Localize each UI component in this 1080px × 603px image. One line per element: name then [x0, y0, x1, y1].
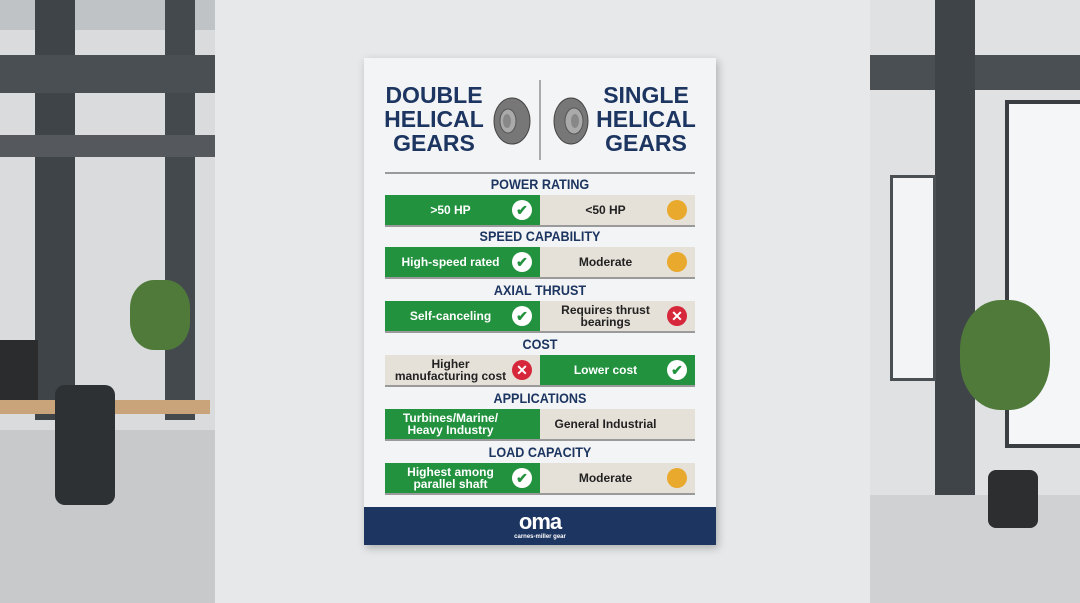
section: applications: APPLICATIONS: [494, 390, 586, 406]
text: ✔: [671, 362, 683, 378]
background: left office: [0, 0, 215, 603]
text: General Industrial: [554, 417, 657, 431]
text: Lower cost: [574, 363, 637, 377]
text: bearings: [580, 315, 630, 329]
text: parallel shaft: [413, 477, 488, 491]
text: >50 HP: [430, 203, 471, 217]
text: ✔: [516, 308, 528, 324]
text: Moderate: [579, 471, 632, 485]
text: Higher: [431, 357, 470, 371]
text: ✕: [516, 362, 528, 378]
text: Self-canceling: [410, 309, 491, 323]
heading: single helical: HELICAL: [596, 106, 696, 132]
heading: double helical: HELICAL: [384, 106, 484, 132]
text: Moderate: [579, 255, 632, 269]
text: ✔: [516, 254, 528, 270]
text: manufacturing cost: [395, 369, 506, 383]
text: ✔: [516, 202, 528, 218]
poster: [364, 58, 716, 545]
footer: logo: carnes-miller gear: [514, 534, 566, 540]
text: Heavy Industry: [407, 423, 494, 437]
text: Turbines/Marine/: [403, 411, 498, 425]
section: load capacity: LOAD CAPACITY: [489, 444, 591, 460]
heading: single helical: SINGLE: [603, 82, 689, 108]
heading: double helical: [384, 82, 484, 156]
section: cost: COST: [522, 336, 557, 352]
heading: single helical: [596, 82, 696, 156]
text: ✔: [516, 470, 528, 486]
footer: logo: oma: [519, 509, 561, 534]
divider: [539, 80, 541, 160]
section: power rating: POWER RATING: [491, 176, 589, 192]
icon: single helical gear: [554, 98, 588, 144]
footer: logo: [364, 507, 716, 545]
text: Highest among: [407, 465, 494, 479]
text: <50 HP: [585, 203, 626, 217]
section: axial thrust: AXIAL THRUST: [494, 282, 586, 298]
icon: double helical gear: [494, 98, 530, 144]
heading: double helical: GEARS: [393, 130, 475, 156]
section: speed: SPEED CAPABILITY: [480, 228, 600, 244]
text: ✕: [671, 308, 683, 324]
text: High-speed rated: [401, 255, 500, 269]
heading: double helical: DOUBLE: [385, 82, 483, 108]
background: right office: [870, 0, 1080, 603]
heading: single helical: GEARS: [605, 130, 687, 156]
text: Requires thrust: [561, 303, 650, 317]
